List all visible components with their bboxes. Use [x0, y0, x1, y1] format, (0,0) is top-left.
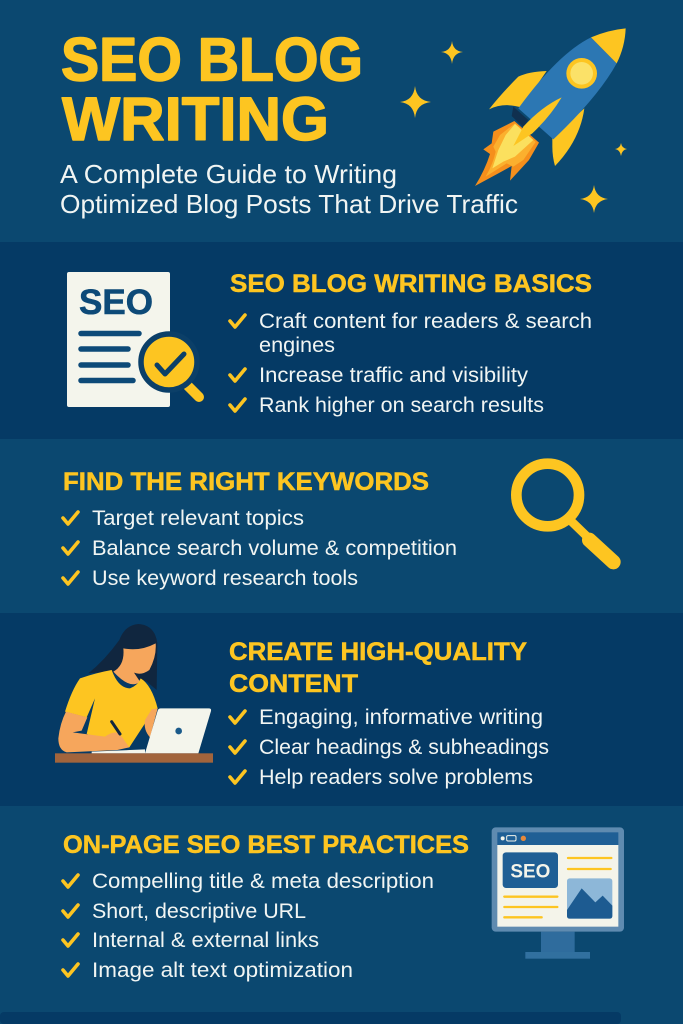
bullet: links: Internal & external links [92, 929, 319, 952]
icon: stars [400, 41, 627, 213]
subtitle [60, 159, 518, 219]
icon: rocket [475, 28, 626, 186]
illustration: woman writing at laptop [55, 624, 213, 763]
subtitle: A Complete Guide to Writing [60, 159, 397, 189]
heading: content [229, 638, 527, 698]
bullet: research tools: Use keyword research tools [92, 567, 358, 590]
panel: SEO blog writing basics [0, 242, 683, 439]
bullet: craft content: engines [259, 334, 335, 357]
bullet: craft content [230, 310, 592, 357]
panel: cropped bottom band [0, 1012, 621, 1024]
title: WRITING [62, 85, 329, 153]
title: SEO BLOG [61, 26, 363, 94]
panel: create high-quality content [0, 613, 683, 806]
bullet: clear headings: Clear headings & subheadings [259, 736, 549, 759]
icon: monitor with SEO page [492, 827, 624, 959]
heading: content: CREATE HIGH-QUALITY [229, 638, 527, 666]
bullet: alt text: Image alt text optimization [92, 959, 353, 982]
panel: find the right keywords [0, 439, 683, 613]
bullet: increase traffic: Increase traffic and visibility [259, 364, 529, 387]
panel: on-page SEO best practices [0, 806, 683, 1024]
heading: on-page: ON-PAGE SEO BEST PRACTICES [63, 831, 469, 859]
bullet: target topics: Target relevant topics [92, 507, 304, 530]
bullet: rank higher: Rank higher on search results [259, 394, 544, 417]
title [61, 26, 363, 153]
panel: header [0, 0, 683, 242]
bullet: craft content: Craft content for readers & search [259, 310, 592, 333]
heading: keywords: FIND THE RIGHT KEYWORDS [63, 468, 429, 496]
bullet: short URL: Short, descriptive URL [92, 900, 306, 923]
heading: basics: SEO BLOG WRITING BASICS [230, 270, 592, 298]
bullet: title and meta: Compelling title & meta description [92, 870, 434, 893]
bullet: solve problems: Help readers solve problems [259, 766, 533, 789]
icon: monitor with SEO page: SEO [510, 862, 550, 883]
bullet: balance volume: Balance search volume & competition [92, 537, 457, 560]
subtitle: Optimized Blog Posts That Drive Traffic [60, 189, 518, 219]
heading: content: CONTENT [229, 670, 358, 698]
bullet: engaging writing: Engaging, informative writing [259, 706, 543, 729]
icon: magnifying glass [516, 464, 613, 562]
icon: SEO document with magnifier: SEO [79, 283, 153, 322]
icon: SEO document with magnifier [67, 272, 199, 407]
